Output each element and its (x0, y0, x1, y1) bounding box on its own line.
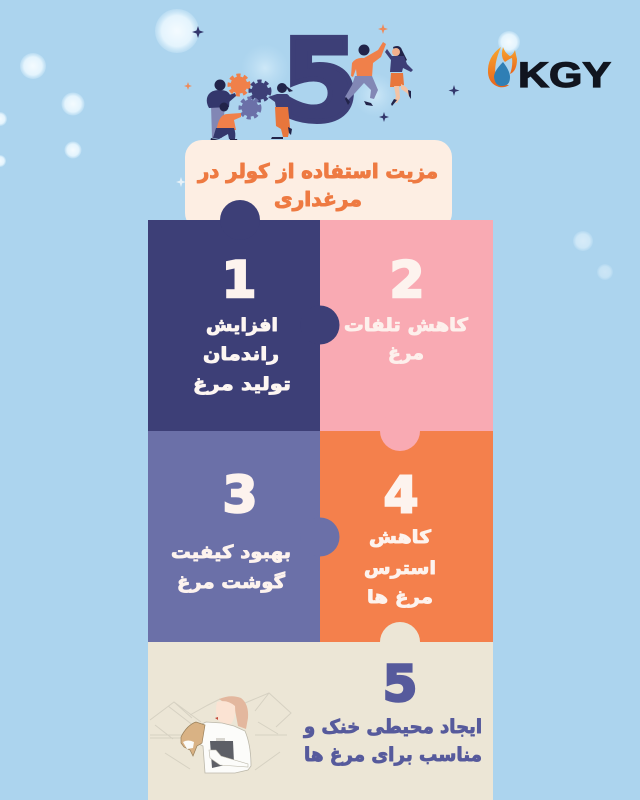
sparkles (176, 24, 460, 197)
text: benefit 5: ایجاد محیطی خنک و (303, 716, 482, 738)
woman with skirt (268, 83, 293, 139)
text: benefit 5 (303, 716, 482, 766)
text: benefit 3: بهبود کیفیت (171, 542, 291, 563)
wordmark: KGY (518, 56, 611, 95)
panel 3: purple (148, 431, 340, 642)
icon: flame and drop (488, 47, 517, 87)
text: benefit 2: کاهش تلفات (344, 315, 469, 336)
text: benefit 5: مناسب برای مرغ ها (304, 744, 482, 766)
text: benefit 1 (193, 315, 291, 395)
jumping woman (385, 46, 413, 106)
standing man (207, 80, 236, 138)
text: benefit 1: راندمان (203, 344, 279, 365)
panel 4: orange (320, 411, 493, 662)
big number 5: 5 (281, 15, 359, 147)
heading: مزیت استفاده از کولر در (197, 159, 438, 183)
background bubbles (0, 9, 613, 280)
text: benefit 3 (171, 542, 291, 593)
number 3: 3 (223, 466, 257, 524)
panel 1: navy (148, 200, 340, 431)
gears (230, 76, 270, 118)
panel: title card (185, 140, 452, 230)
text: benefit 4: کاهش (369, 527, 432, 548)
text: benefit 1: افزایش (206, 315, 278, 336)
number 2: 2 (390, 251, 424, 309)
text: benefit 4: استرس (364, 558, 436, 579)
logo: KGY (488, 31, 611, 95)
illustration: sketch of poultry house (150, 693, 291, 770)
crouching man (210, 102, 241, 142)
illustration: team with gears (207, 42, 413, 142)
panel 5: cool environment (148, 642, 493, 800)
text: benefit 1: تولید مرغ (193, 374, 291, 395)
heading: مرغداری (274, 187, 362, 211)
panel 2: pink (320, 220, 493, 431)
text: benefit 2 (344, 315, 469, 364)
text: benefit 4: مرغ ها (367, 587, 433, 608)
heading (197, 159, 438, 211)
illustration: woman holding chicken (181, 696, 251, 773)
jumping man (345, 42, 386, 106)
text: benefit 3: گوشت مرغ (177, 571, 286, 593)
number 1: 1 (222, 251, 256, 309)
text: benefit 4 (364, 527, 436, 608)
text: benefit 2: مرغ (388, 343, 424, 364)
number 5: 5 (383, 655, 417, 713)
number 4: 4 (384, 466, 418, 524)
